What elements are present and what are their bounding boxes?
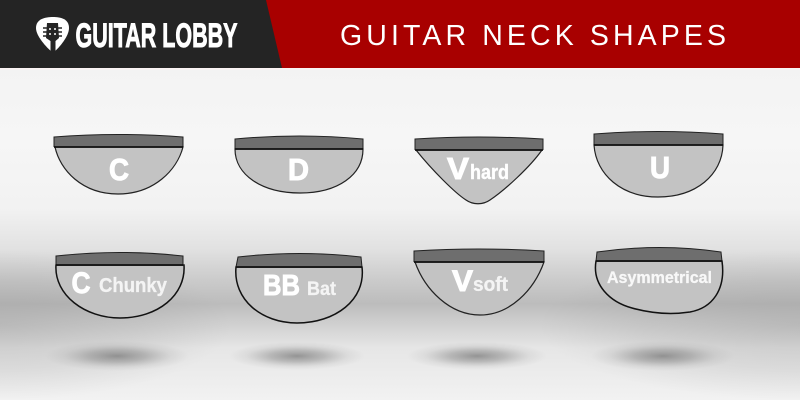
logo wordmark: GUITAR LOBBY (76, 17, 238, 55)
neck shape: Asymmetrical: Asymmetrical (607, 268, 712, 287)
neck shape: U: U (650, 150, 670, 185)
neck shape: BB Bat: Bat (307, 279, 337, 300)
neck shape: V hard: V (447, 151, 469, 186)
neck shape: BB Bat: BB (263, 270, 300, 302)
neck shape: D (235, 136, 363, 193)
neck shape: C: C (109, 152, 129, 187)
shadow under C Chunky (45, 341, 189, 371)
neck shape: C (54, 134, 183, 194)
neck shape: C Chunky (56, 252, 184, 318)
neck shape: U (594, 132, 723, 197)
neck shape: BB Bat (236, 254, 362, 323)
neck shape: V soft: soft (473, 274, 508, 296)
header band (0, 0, 800, 70)
neck shape: D: D (288, 152, 309, 187)
neck shape: V soft: V (452, 265, 473, 298)
shadow under BB Bat (229, 342, 365, 370)
neck shape: C Chunky: C (72, 267, 90, 300)
logo (36, 17, 238, 55)
title: GUITAR NECK SHAPES (340, 20, 726, 52)
neck shape: V hard: hard (470, 162, 509, 184)
neck shape: C Chunky: Chunky (99, 275, 168, 297)
shadow under Asymmetrical (591, 341, 735, 371)
neck shape: V soft (414, 249, 544, 315)
icon: guitar pick with headstock (36, 17, 69, 53)
shadow under V soft (407, 342, 547, 370)
neck shape: Asymmetrical (595, 248, 723, 313)
neck shape: V hard (415, 137, 543, 204)
